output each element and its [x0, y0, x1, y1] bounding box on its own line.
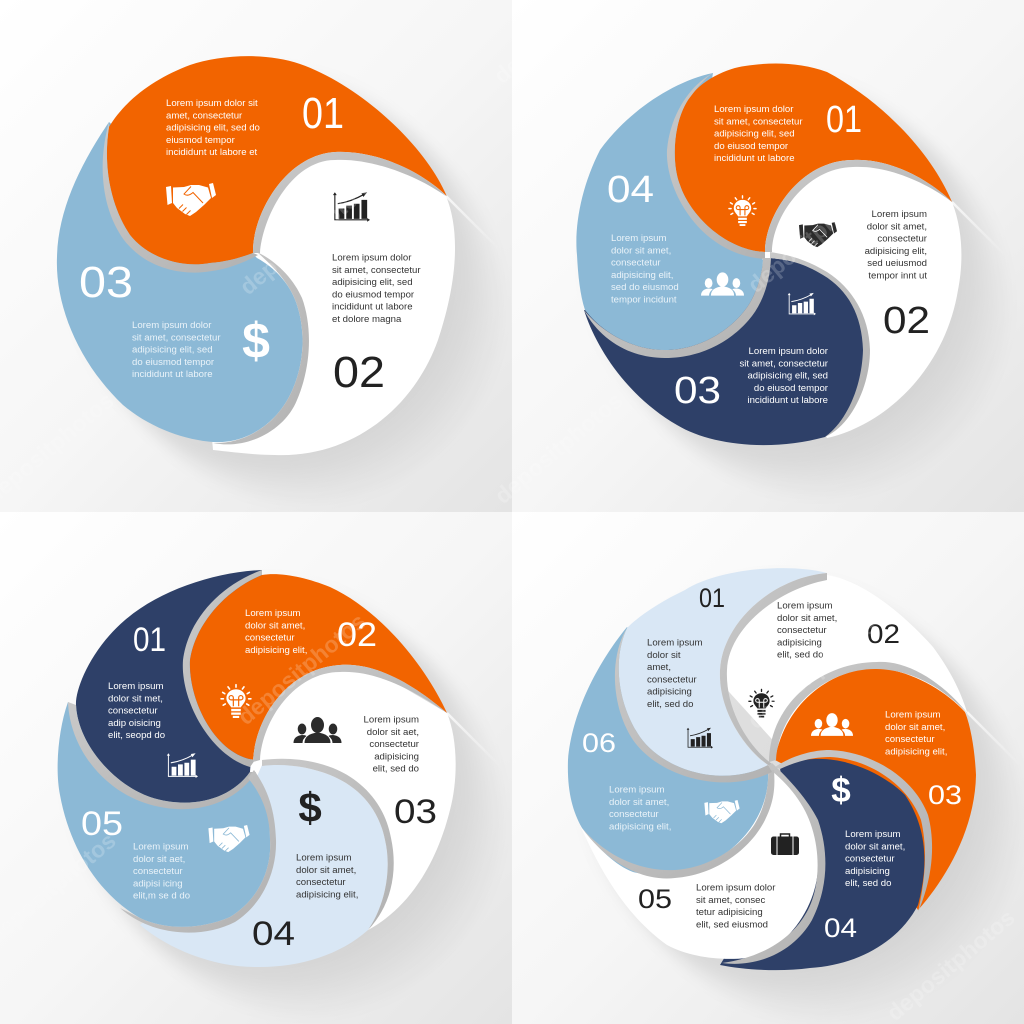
number 03: 03: [674, 370, 721, 412]
text block 05: dolor sit aet,: [133, 854, 185, 865]
icon: handshake: [799, 222, 837, 247]
highlight streak: [446, 196, 500, 250]
number 04: 04: [607, 169, 654, 211]
rim of segment 03: [253, 665, 447, 762]
number 04: 04: [824, 913, 857, 943]
text block 02: elit, sed do: [777, 650, 823, 661]
segment 03 white: [240, 650, 456, 930]
rim of segment 02: [765, 160, 952, 252]
text block 02: tempor innt ut: [868, 270, 927, 282]
text block 02: adipisicing elit,: [245, 645, 307, 656]
panel: six-step cycle: [568, 568, 1022, 1018]
text block 03: adipisicing elit, sed: [132, 345, 213, 356]
segment 03 blue: [57, 122, 303, 442]
segment 05 blue: [58, 702, 270, 927]
rim of segment 03: [769, 662, 968, 762]
segment 04 blue: [576, 73, 763, 350]
text block 03: sit amet, consectetur: [132, 332, 221, 343]
number 01: 01: [302, 89, 344, 138]
text block 02: adipisicing elit, sed: [332, 277, 413, 288]
text block 03: Lorem ipsum dolor: [749, 346, 829, 357]
text block 01: do eiusod tempor: [714, 141, 789, 152]
segment 02 white: [700, 575, 967, 770]
text block 04: adipisicing elit,: [611, 270, 673, 281]
text block 01: Lorem ipsum dolor sit: [166, 98, 258, 109]
text block 04: adipisicing: [845, 866, 890, 877]
text block 02: adipisicing: [777, 637, 822, 648]
text block 05: adipisi icing: [133, 878, 183, 889]
text block 03: adipisicing elit, sed: [747, 371, 828, 382]
text block 01: adip oisicing: [108, 718, 161, 729]
text block 02: sit amet, consectetur: [332, 265, 421, 276]
text block 02: Lorem ipsum dolor: [332, 252, 412, 264]
number 02: 02: [337, 616, 377, 654]
text block 01: incididunt ut labore et: [166, 147, 258, 158]
text block 04: dolor sit amet,: [611, 245, 671, 256]
rim of segment 04: [775, 750, 932, 912]
text block 05: Lorem ipsum: [133, 842, 188, 852]
text block 02: incididunt ut labore: [332, 302, 413, 313]
text block 04: consectetur: [611, 258, 661, 269]
text block 01: Lorem ipsum dolor: [714, 104, 794, 115]
text block 02: consectetur: [877, 234, 928, 245]
text block 04: sed do eiusmod: [611, 282, 679, 293]
text block 03: incididunt ut labore: [747, 395, 828, 406]
text block 03: do eiusmod tempor: [132, 357, 215, 368]
text block 01: adipisicing elit, sed: [714, 129, 795, 140]
text block 05: tetur adipisicing: [696, 907, 763, 918]
text block 02: do eiusmod tempor: [332, 289, 415, 300]
text block 06: consectetur: [609, 809, 659, 820]
text block 02: dolor sit amet,: [777, 613, 837, 624]
rim of segment 01: [68, 702, 256, 809]
long shadow: [66, 578, 502, 1014]
text block 01: Lorem ipsum: [108, 681, 163, 692]
segment 04 light blue: [140, 764, 388, 967]
text block 01: sit amet, consectetur: [714, 116, 803, 127]
text block 01: amet,: [647, 662, 671, 673]
text block 02: sed ueiusmod: [867, 258, 927, 269]
long shadow: [584, 71, 1008, 495]
text block 04: elit, sed do: [845, 878, 891, 889]
text block 04: consectetur: [845, 854, 895, 865]
text block 01: dolor sit met,: [108, 693, 163, 704]
text block 03: incididunt ut labore: [132, 369, 213, 380]
icon: handshake: [166, 183, 216, 216]
rim of segment 01: [103, 122, 258, 273]
text block 02: dolor sit amet,: [867, 221, 927, 232]
icon: handshake: [704, 800, 740, 823]
text block 01: elit, seopd do: [108, 730, 165, 741]
text block 02: consectetur: [245, 633, 295, 644]
icon: light bulb: [221, 685, 251, 718]
rim of segment 01: [615, 628, 772, 782]
long shadow: [578, 574, 1022, 1018]
text block 04: consectetur: [296, 877, 346, 888]
text block 06: adipisicing elit,: [609, 821, 671, 832]
text block 05: consectetur: [133, 866, 183, 877]
rim of segment 02: [253, 152, 446, 253]
segment 01 orange: [107, 56, 447, 264]
text block 02: consectetur: [777, 625, 827, 636]
rim of segment 05: [722, 763, 825, 964]
segment 03 navy: [584, 258, 866, 445]
number 05: 05: [81, 805, 123, 843]
number 03: 03: [394, 793, 437, 831]
text block 01: adipisicing: [647, 687, 692, 698]
icon: light bulb: [749, 689, 774, 718]
segment 03 orange: [775, 668, 976, 910]
text block 01: elit, sed do: [647, 699, 693, 710]
watermarks: depositphotos: [882, 904, 1020, 1024]
icon: dollar: $: [242, 313, 270, 369]
text block 06: dolor sit amet,: [609, 797, 669, 808]
text block 03: Lorem ipsum: [364, 714, 419, 726]
rim of segment 04: [584, 258, 771, 358]
number 01: 01: [133, 621, 166, 659]
text block 01: Lorem ipsum: [647, 638, 702, 648]
number 01: 01: [826, 99, 862, 141]
rim of segment 03: [213, 252, 309, 444]
text block 04: dolor sit amet,: [296, 865, 356, 876]
segment 01 navy: [76, 570, 262, 803]
text block 02: et dolore magna: [332, 314, 402, 325]
rim of segment 02: [720, 573, 827, 767]
text block 01: amet, consectetur: [166, 110, 243, 121]
watermarks: depositphotos: [743, 176, 881, 298]
icon: people: [701, 272, 744, 296]
text block 04: adipisicing elit,: [296, 889, 358, 900]
rim of segment 02: [183, 570, 262, 767]
text block 02: dolor sit amet,: [245, 620, 305, 631]
watermarks: depositphotos: [233, 608, 371, 730]
text block 05: sit amet, consec: [696, 895, 766, 906]
number 02: 02: [883, 300, 930, 342]
text block 03: sit amet, consectetur: [739, 358, 829, 369]
icon: people: [811, 713, 853, 736]
text block 03: dolor sit aet,: [367, 727, 419, 738]
watermarks: depositphotos: [490, 387, 628, 509]
text block 03: Lorem ipsum: [885, 710, 940, 720]
text block 04: tempor incidunt: [611, 294, 677, 306]
text block 04: Lorem ipsum: [611, 233, 666, 244]
text block 03: elit, sed do: [373, 764, 419, 775]
text block 04: Lorem ipsum: [845, 829, 900, 840]
icon: dollar: $: [831, 771, 851, 810]
text block 01: dolor sit: [647, 650, 681, 661]
long shadow: [66, 66, 502, 502]
text block 02: adipisicing elit,: [865, 246, 927, 257]
text block 03: dolor sit amet,: [885, 722, 945, 733]
text block 05: elit,m se d do: [133, 891, 190, 902]
text block 03: adipisicing elit,: [885, 746, 947, 757]
segment 05 white: [580, 765, 818, 959]
highlight streak: [967, 712, 1021, 766]
segment 06 blue: [568, 627, 768, 875]
rim of segment 01: [667, 73, 765, 259]
highlight streak: [447, 713, 501, 767]
panel: four-step cycle: [576, 64, 1008, 495]
text block 06: Lorem ipsum: [609, 784, 664, 796]
rim of segment 05: [120, 770, 276, 933]
text block 02: Lorem ipsum: [872, 209, 927, 220]
segment 01 orange: [675, 64, 952, 252]
segment 02 white: [740, 130, 961, 438]
text block 03: consectetur: [885, 734, 935, 745]
segment 02 orange: [190, 574, 447, 762]
segment 02 white: [200, 130, 455, 455]
icon: handshake: [208, 825, 250, 852]
text block 01: incididunt ut labore: [714, 153, 795, 164]
segment 04 navy: [720, 759, 924, 970]
text block 02: Lorem ipsum: [245, 608, 300, 619]
panel: five-step cycle: [58, 570, 502, 1014]
icon: chart: [687, 728, 713, 749]
watermarks: depositphotos: [235, 178, 373, 300]
text block 01: consectetur: [108, 706, 158, 717]
text block 04: Lorem ipsum: [296, 852, 351, 864]
text block 01: eiusmod tempor: [166, 135, 236, 146]
segment 01 light blue: [619, 568, 827, 776]
text block 03: Lorem ipsum dolor: [132, 320, 212, 331]
icon: briefcase: [771, 834, 799, 855]
number 05: 05: [638, 884, 672, 914]
number 06: 06: [582, 728, 616, 758]
text block 01: adipisicing elit, sed do: [166, 123, 260, 134]
text block 03: do eiusod tempor: [754, 383, 829, 394]
rim of segment 03: [770, 252, 870, 437]
number 02: 02: [333, 348, 385, 397]
number 03: 03: [928, 780, 962, 810]
number 03: 03: [79, 258, 133, 307]
panel: three-step cycle: [57, 56, 502, 502]
icon: chart: [333, 192, 370, 222]
rim of segment 04: [262, 759, 394, 930]
text block 05: elit, sed eiusmod: [696, 919, 768, 930]
icon: people: [294, 717, 342, 743]
text block 04: dolor sit amet,: [845, 841, 905, 852]
icon: light bulb: [729, 196, 756, 226]
number 04: 04: [252, 915, 295, 953]
watermarks: depositphotos: [743, 612, 881, 734]
icon: chart: [167, 753, 198, 778]
rim of segment 06: [582, 770, 774, 878]
text block 02: Lorem ipsum: [777, 600, 832, 612]
icon: chart: [788, 293, 816, 315]
text block 03: consectetur: [369, 739, 420, 750]
text block 01: consectetur: [647, 674, 697, 685]
text block 03: adipisicing: [374, 751, 419, 762]
number 02: 02: [867, 619, 900, 649]
highlight streak: [952, 202, 1006, 256]
text block 05: Lorem ipsum dolor: [696, 882, 776, 894]
number 01: 01: [699, 583, 725, 613]
icon: dollar: $: [298, 784, 322, 831]
